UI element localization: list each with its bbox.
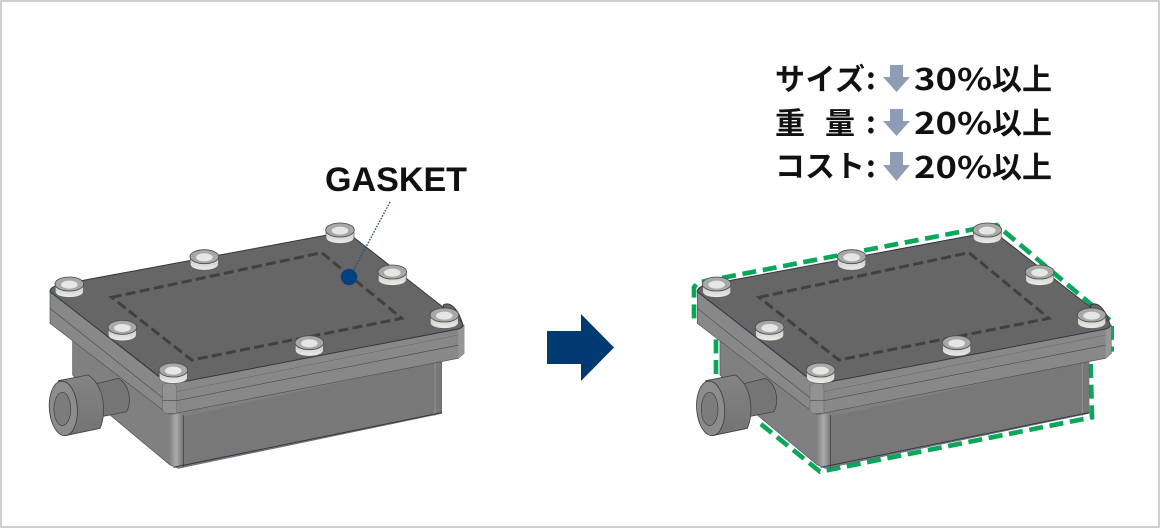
- left product: original enclosure: [47, 223, 464, 468]
- row: weight: [775, 98, 1052, 143]
- leader line: [351, 202, 390, 275]
- row: size: :: [866, 54, 876, 98]
- improved enclosure: [695, 223, 1111, 468]
- icon: down arrow: [883, 152, 910, 181]
- right product: reduced enclosure with green outline: [694, 223, 1112, 472]
- row: cost: 以上: [992, 143, 1052, 187]
- gasket callout: [325, 161, 467, 285]
- icon: down arrow: [883, 109, 910, 136]
- reduction figures: [775, 54, 1052, 187]
- row: size: サイズ: [775, 55, 865, 99]
- row: size: [775, 54, 1052, 99]
- row: weight: 20%: [914, 99, 992, 143]
- row: weight: 以上: [992, 99, 1052, 143]
- row: size: 以上: [992, 55, 1052, 99]
- row: cost: [775, 142, 1052, 187]
- row: cost: コスト: [775, 142, 865, 186]
- icon: down arrow: [883, 65, 910, 92]
- gasket marker dot: [341, 269, 357, 285]
- green dashed outline of original size: [694, 225, 1112, 472]
- row: weight: 量: [825, 99, 855, 143]
- row: size: 30%: [914, 55, 992, 99]
- row: cost: 20%: [914, 143, 992, 187]
- arrow: transition to improved design: [547, 314, 614, 381]
- gasket label: GASKET: [325, 161, 467, 199]
- row: weight: :: [866, 98, 876, 142]
- row: weight: 重: [775, 99, 805, 143]
- row: cost: :: [866, 142, 876, 186]
